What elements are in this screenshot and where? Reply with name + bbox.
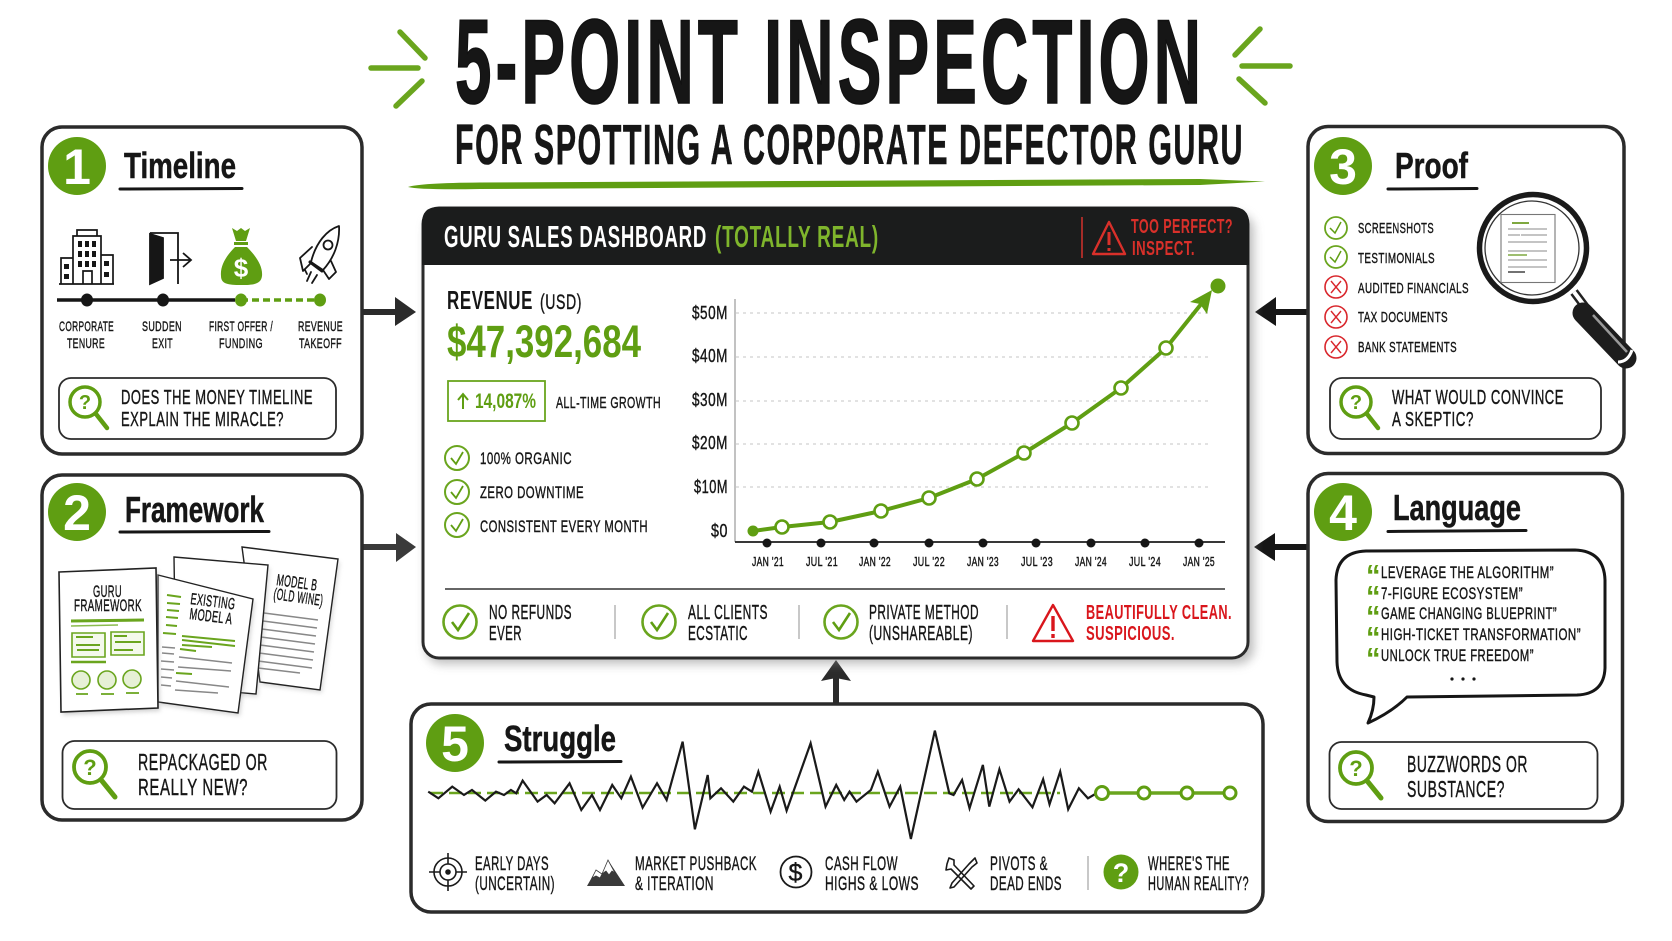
callout: money timeline question: EXPLAIN THE MIRACLE? — [121, 409, 284, 431]
x axis labels: JAN '22 — [859, 554, 891, 569]
heading underline — [499, 760, 621, 764]
document: guru framework: GURU — [93, 582, 122, 601]
check: consistent — [445, 513, 648, 537]
callout: money timeline question — [59, 378, 336, 439]
timeline labels: CORPORATE — [59, 318, 114, 334]
heading underline — [120, 187, 242, 190]
timeline labels: FUNDING — [219, 335, 263, 351]
check: testimonials — [1325, 246, 1435, 268]
number badge 1: 1 — [63, 139, 91, 195]
number badge 1 — [48, 137, 106, 195]
icon: target — [429, 853, 467, 891]
y axis labels: $50M — [692, 303, 728, 323]
check: zero downtime: ZERO DOWNTIME — [480, 483, 584, 502]
claim: all clients: ECSTATIC — [688, 623, 748, 645]
claim: private method: PRIVATE METHOD — [869, 602, 979, 624]
heading: struggle: Struggle — [504, 718, 616, 759]
timeline labels: FIRST OFFER / — [209, 318, 273, 334]
timeline labels: TAKEOFF — [299, 335, 342, 351]
claim: no refunds — [444, 602, 572, 645]
cross: tax documents: TAX DOCUMENTS — [1358, 310, 1448, 326]
label: early days — [475, 854, 555, 895]
x axis dots — [762, 538, 1204, 548]
y axis labels: $30M — [692, 390, 728, 410]
x axis labels: JUL '21 — [806, 554, 838, 569]
callout: money timeline question: DOES THE MONEY TIMELINE — [121, 387, 313, 409]
revenue line chart — [692, 278, 1226, 569]
x axis labels: JAN '24 — [1075, 554, 1107, 569]
dashboard title note: (TOTALLY REAL) — [715, 219, 879, 254]
icon: question badge — [1104, 854, 1138, 890]
icon: crossed tools — [946, 858, 977, 889]
claim: private method: (UNSHAREABLE) — [869, 623, 973, 645]
number badge 5 — [426, 714, 484, 772]
number badge 2: 2 — [63, 485, 91, 541]
dashboard shadow — [426, 214, 1254, 664]
warning: too perfect — [1082, 216, 1233, 260]
document: back sheet — [174, 557, 270, 697]
document: model B: (OLD WINE) — [272, 586, 324, 610]
label: cash flow: CASH FLOW — [825, 854, 898, 875]
speech bubble: 7-FIGURE ECOSYSTEM” — [1381, 585, 1523, 603]
arrow: timeline to dashboard — [363, 297, 416, 326]
icon: dollar coin: $ — [789, 859, 803, 887]
icon: question magnifier: ? — [83, 755, 97, 780]
x axis labels: JAN '23 — [967, 554, 999, 569]
y axis labels: $10M — [694, 477, 728, 497]
icon: mountains — [587, 860, 625, 886]
y axis labels: $0 — [711, 521, 728, 541]
claim: no refunds: EVER — [489, 623, 522, 645]
callout: skeptic question: A SKEPTIC? — [1392, 409, 1474, 431]
heading: timeline: Timeline — [124, 145, 236, 186]
callout: buzzwords question: SUBSTANCE? — [1407, 776, 1505, 802]
volatility line chart — [428, 731, 1236, 839]
panel: guru sales dashboard — [422, 207, 1249, 658]
icon: money bag: $ — [234, 253, 249, 283]
claim: all clients: ALL CLIENTS — [688, 602, 768, 624]
label: market pushback — [635, 854, 757, 895]
green brush underline — [408, 179, 1265, 189]
callout: repackaged question — [62, 741, 336, 809]
label: pivots — [990, 854, 1062, 895]
label: market pushback: & ITERATION — [635, 874, 714, 895]
claim: private method — [824, 602, 979, 645]
right sparkle marks — [1235, 29, 1290, 103]
icon: dollar coin — [780, 856, 812, 888]
label: human reality: HUMAN REALITY? — [1148, 874, 1249, 895]
label: human reality: WHERE'S THE — [1148, 854, 1230, 875]
check: screenshots: SCREENSHOTS — [1358, 221, 1434, 237]
document: model B — [242, 547, 340, 693]
warning: too perfect: TOO PERFECT? — [1131, 216, 1233, 238]
heading underline — [120, 530, 269, 534]
icon: question magnifier — [74, 751, 115, 797]
panel: proof — [1308, 126, 1632, 454]
left sparkle marks — [371, 32, 425, 106]
panel: timeline — [42, 127, 362, 454]
panel: framework — [42, 475, 362, 820]
label: market pushback: MARKET PUSHBACK — [635, 854, 757, 875]
warning: beautifully clean: BEAUTIFULLY CLEAN. — [1086, 602, 1232, 624]
check: zero downtime — [445, 480, 584, 504]
warning: too perfect: INSPECT. — [1132, 238, 1195, 260]
growth curve — [748, 278, 1226, 536]
speech bubble: “ — [1366, 643, 1380, 675]
heading underline — [1388, 187, 1477, 190]
x axis labels: JUL '22 — [913, 554, 945, 569]
number badge 2 — [48, 483, 106, 541]
label: pivots: DEAD ENDS — [990, 874, 1062, 895]
x axis labels — [752, 554, 1215, 569]
callout: buzzwords question — [1330, 742, 1598, 809]
timeline labels: TENURE — [67, 335, 105, 351]
icon: office building — [59, 230, 114, 284]
icon: question magnifier: ? — [1349, 756, 1363, 781]
y axis labels: $20M — [692, 433, 728, 453]
y axis labels — [692, 303, 728, 541]
speech bubble — [1336, 550, 1605, 723]
icon: question magnifier: ? — [1350, 392, 1362, 414]
panel: struggle — [411, 704, 1263, 912]
dashboard title: GURU SALES DASHBOARD — [444, 219, 707, 254]
speech bubble: “ — [1366, 581, 1380, 613]
speech bubble: UNLOCK TRUE FREEDOM” — [1381, 647, 1534, 665]
callout: buzzwords question: BUZZWORDS OR — [1407, 751, 1528, 777]
arrow: language to dashboard — [1254, 533, 1308, 561]
arrow: proof to dashboard — [1255, 297, 1308, 326]
timeline labels: SUDDEN — [142, 318, 182, 334]
growth caption: ALL-TIME GROWTH — [556, 395, 661, 412]
number badge 4 — [1314, 483, 1372, 541]
x axis labels: JAN '25 — [1183, 554, 1215, 569]
heading: language: Language — [1393, 487, 1521, 528]
icon: magnifying glass over document — [1480, 194, 1632, 362]
speech bubble: “ — [1366, 622, 1380, 654]
document: existing model A — [158, 575, 255, 716]
revenue value: $47,392,684 — [447, 316, 641, 367]
check: consistent: CONSISTENT EVERY MONTH — [480, 517, 648, 536]
cross: bank statements: BANK STATEMENTS — [1358, 340, 1457, 356]
number badge 5: 5 — [441, 716, 469, 772]
icon: exit door — [150, 233, 191, 284]
timeline labels: EXIT — [152, 335, 173, 351]
panel: language — [1308, 474, 1622, 822]
heading: framework: Framework — [125, 489, 265, 530]
check: testimonials: TESTIMONIALS — [1358, 251, 1435, 267]
heading: proof: Proof — [1395, 145, 1469, 186]
document: model B: MODEL B — [275, 572, 318, 595]
document: guru framework — [59, 568, 160, 715]
claim: all clients — [642, 602, 768, 645]
label: pivots: PIVOTS & — [990, 854, 1048, 875]
icon: question magnifier: ? — [79, 392, 91, 414]
number badge 4: 4 — [1329, 485, 1357, 541]
speech bubble: HIGH-TICKET TRANSFORMATION” — [1381, 626, 1581, 644]
callout: repackaged question: REPACKAGED OR — [138, 749, 268, 775]
cross: tax documents — [1325, 306, 1448, 328]
icon: money bag — [221, 228, 262, 285]
heading underline — [1388, 530, 1526, 532]
icon: question magnifier — [1341, 387, 1378, 428]
number badge 3 — [1314, 137, 1372, 195]
check: screenshots — [1325, 217, 1434, 239]
revenue label: (USD) — [540, 291, 582, 314]
speech bubble: GAME CHANGING BLUEPRINT” — [1381, 605, 1557, 623]
document: guru framework: FRAMEWORK — [74, 596, 142, 615]
arrow: framework to dashboard — [363, 533, 416, 562]
claim: no refunds: NO REFUNDS — [489, 602, 572, 624]
icon: rocket — [300, 226, 339, 283]
arrow: struggle to dashboard — [821, 660, 851, 705]
callout: skeptic question — [1330, 378, 1601, 439]
label: cash flow — [825, 854, 919, 895]
icon: question magnifier — [70, 387, 107, 428]
cross: bank statements — [1325, 336, 1457, 358]
label: human reality — [1148, 854, 1249, 895]
icon: question badge: ? — [1113, 858, 1129, 888]
document: existing model A: EXISTING — [190, 591, 236, 613]
callout: repackaged question: REALLY NEW? — [138, 774, 248, 800]
timeline labels: REVENUE — [298, 318, 343, 334]
icon: question magnifier — [1340, 752, 1381, 798]
growth badge — [448, 381, 545, 421]
cross: audited financials — [1325, 276, 1469, 298]
label: cash flow: HIGHS & LOWS — [825, 874, 919, 895]
check: 100% organic: 100% ORGANIC — [480, 449, 572, 468]
callout: skeptic question: WHAT WOULD CONVINCE — [1392, 387, 1564, 409]
document: existing model A: MODEL A — [189, 606, 233, 628]
label: early days: (UNCERTAIN) — [475, 874, 555, 895]
warning: beautifully clean: SUSPICIOUS. — [1086, 623, 1175, 645]
speech bubble: “ — [1366, 560, 1380, 592]
revenue label: REVENUE — [447, 285, 533, 315]
x axis labels: JAN '21 — [752, 554, 784, 569]
speech bubble: LEVERAGE THE ALGORITHM” — [1381, 564, 1554, 582]
speech bubble: “ — [1366, 601, 1380, 633]
y axis labels: $40M — [692, 346, 728, 366]
x axis labels: JUL '23 — [1021, 554, 1053, 569]
warning: beautifully clean — [1033, 602, 1232, 645]
timeline labels — [59, 318, 343, 351]
label: early days: EARLY DAYS — [475, 854, 549, 875]
growth badge: 14,087% — [475, 390, 536, 413]
dashboard header bar — [422, 207, 1249, 265]
cross: audited financials: AUDITED FINANCIALS — [1358, 281, 1469, 297]
number badge 3: 3 — [1329, 139, 1357, 195]
x axis labels: JUL '24 — [1129, 554, 1161, 569]
timeline track — [57, 294, 326, 306]
bottom divider — [445, 588, 1225, 590]
check: 100% organic — [445, 446, 572, 470]
